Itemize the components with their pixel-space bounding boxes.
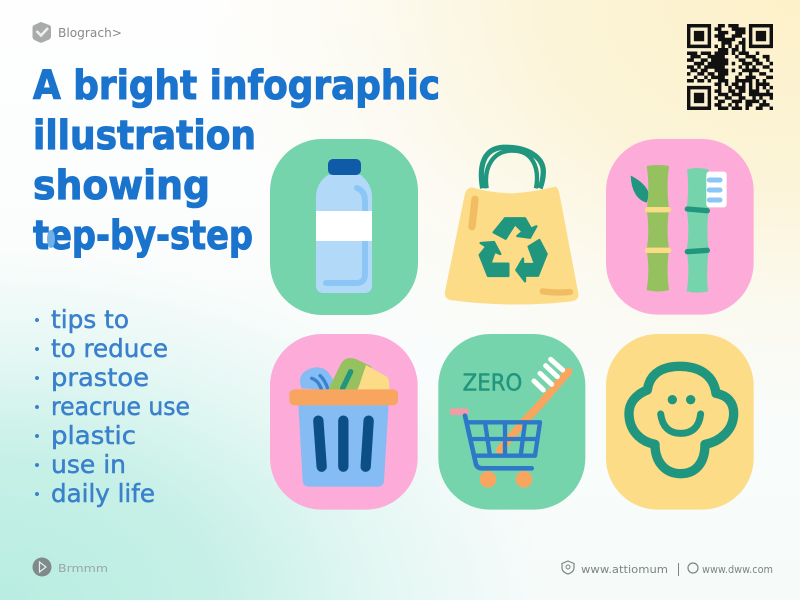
card: recycling tote bag bbox=[445, 147, 578, 305]
card: plastic bottle bbox=[270, 139, 418, 315]
brand logo bbox=[33, 22, 122, 42]
title: illustration bbox=[33, 113, 256, 159]
card: bamboo and toothbrush bbox=[606, 139, 754, 315]
bullet list: use in bbox=[51, 450, 126, 479]
title: tep-by-step bbox=[33, 213, 253, 259]
bullet list: tips to bbox=[51, 305, 129, 334]
card: zero waste shopping cart bbox=[438, 334, 585, 510]
title bbox=[33, 63, 440, 259]
bullet list bbox=[35, 305, 190, 508]
footer brand: Brmmm bbox=[58, 562, 108, 575]
bullet list: prastoe bbox=[51, 363, 149, 392]
footer website links bbox=[562, 561, 773, 576]
title: showing bbox=[33, 163, 210, 209]
bullet list: daily life bbox=[51, 479, 155, 508]
footer brand bbox=[32, 558, 108, 576]
card: zero waste shopping cart: ZERO bbox=[463, 371, 522, 397]
bullet list: reacrue use bbox=[51, 392, 190, 421]
brand logo: Blograch> bbox=[58, 25, 122, 40]
card: waste basket bbox=[270, 334, 418, 510]
bullet list: to reduce bbox=[51, 334, 168, 363]
card: smiley cloud bbox=[606, 334, 754, 510]
QR code bbox=[687, 26, 773, 108]
title: A bright infographic bbox=[33, 63, 440, 109]
footer website links: www.dww.com bbox=[702, 563, 773, 576]
bullet list: plastic bbox=[51, 421, 136, 450]
footer website links: www.attiomum bbox=[581, 563, 668, 576]
